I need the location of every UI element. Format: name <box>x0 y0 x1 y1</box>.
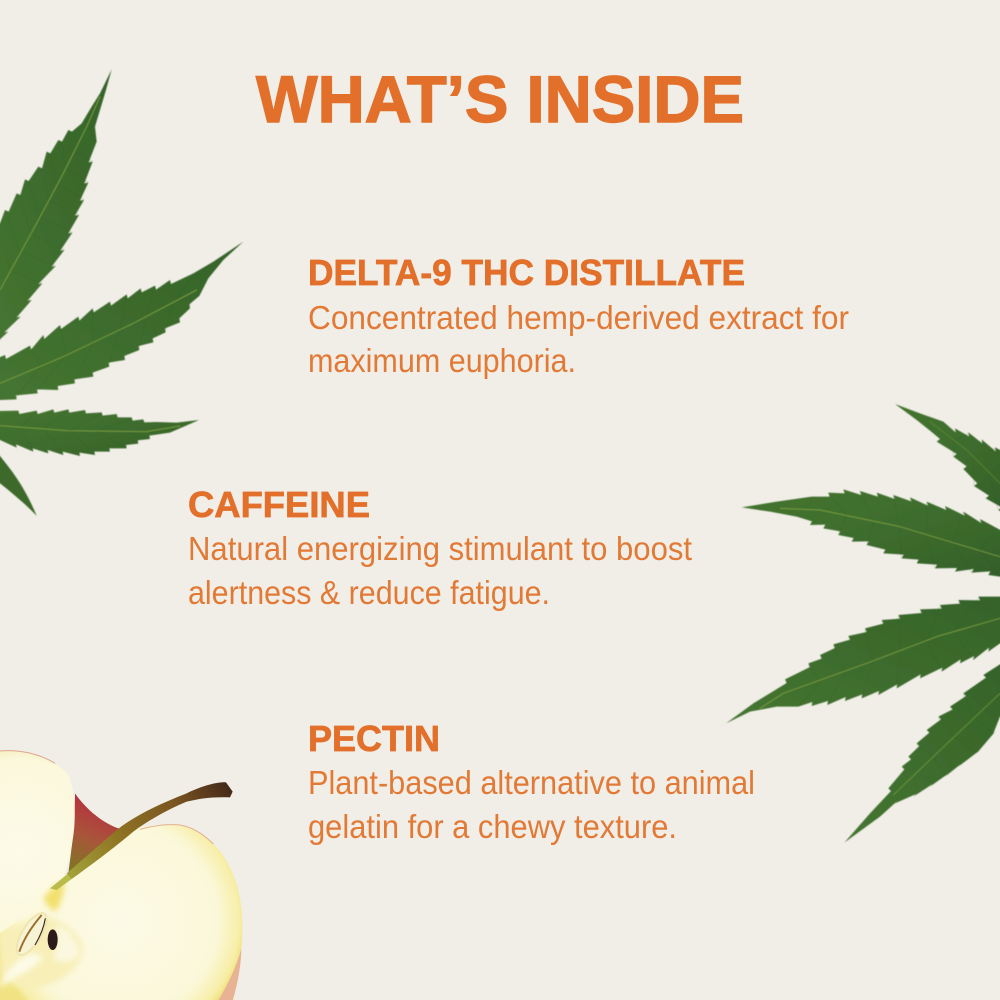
description: Concentrated hemp-derived extract for <box>308 299 849 336</box>
description: alertness & reduce fatigue. <box>188 574 550 611</box>
heading: DELTA-9 THC DISTILLATE <box>308 252 745 293</box>
apple rim <box>140 825 213 844</box>
description <box>188 530 692 611</box>
apple core <box>0 882 83 988</box>
description <box>308 299 849 379</box>
apple seed pocket <box>11 909 52 959</box>
apple seed <box>48 929 58 950</box>
apple flesh left half <box>0 751 75 933</box>
apple stem <box>50 782 233 890</box>
leaflet: bottom <box>844 660 1000 843</box>
description: gelatin for a chewy texture. <box>308 808 677 845</box>
apple skin lower right <box>218 948 241 1000</box>
description: Plant-based alternative to animal <box>308 764 755 801</box>
description <box>308 764 755 845</box>
icon: halved apple <box>0 751 242 1000</box>
ingredient: caffeine <box>188 484 692 611</box>
leaflet: lower <box>0 409 199 456</box>
icon: hemp leaf top left <box>0 69 243 516</box>
heading: CAFFEINE <box>188 484 370 525</box>
description: maximum euphoria. <box>308 342 576 379</box>
ingredient: pectin <box>308 718 755 845</box>
leaflet: upper <box>742 489 1000 578</box>
heading: PECTIN <box>308 718 440 759</box>
leaflet: small bottom <box>0 453 37 516</box>
icon: hemp leaf right <box>726 404 1000 843</box>
leaflet: middle <box>0 242 243 402</box>
apple rim left <box>0 751 55 763</box>
leaflet: top <box>895 404 1000 515</box>
leaflet: upper <box>0 69 112 347</box>
title: WHAT’S INSIDE <box>256 62 744 136</box>
leaflet: lower <box>726 597 1000 723</box>
apple flesh right half <box>0 825 242 1000</box>
description: Natural energizing stimulant to boost <box>188 530 692 567</box>
apple skin behind stem <box>68 793 119 873</box>
ingredient: delta-9 <box>308 252 849 379</box>
